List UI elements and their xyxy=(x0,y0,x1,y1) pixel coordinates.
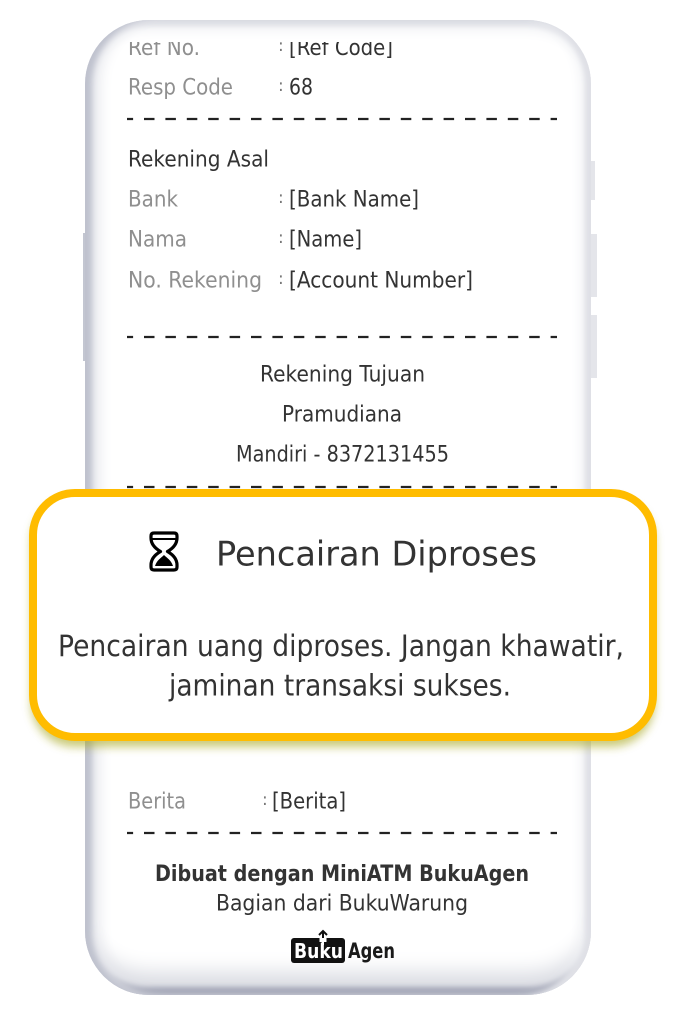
receipt: transaction codes: Ref No. xyxy=(128,36,200,61)
receipt: transaction codes: : xyxy=(278,76,284,96)
BukuAgen logo: Agen xyxy=(348,939,395,963)
callout body text: Pencairan uang diproses. Jangan khawatir, xyxy=(58,629,624,663)
receipt: transaction codes: Resp Code xyxy=(128,76,233,100)
receipt: message row: : xyxy=(262,790,268,810)
receipt: source account: Bank xyxy=(128,188,178,212)
receipt: message row: Berita xyxy=(128,790,186,814)
receipt: destination account: Rekening Tujuan xyxy=(260,362,425,388)
dashed divider 3 xyxy=(127,486,557,488)
callout card xyxy=(31,493,655,747)
icon: hourglass xyxy=(151,533,177,570)
dashed divider 4 xyxy=(127,832,557,834)
callout body text xyxy=(58,629,624,702)
footer text xyxy=(155,862,529,916)
phone side button: right top xyxy=(590,161,595,200)
receipt: source account: No. Rekening xyxy=(128,268,262,294)
receipt: transaction codes: 68 xyxy=(289,76,313,100)
receipt: source account: [Bank Name] xyxy=(289,188,419,212)
phone side button: right bottom xyxy=(590,315,597,378)
receipt: source account: [Name] xyxy=(289,228,362,252)
receipt: transaction codes: [Ref Code] xyxy=(289,36,393,61)
receipt: source account: [Account Number] xyxy=(289,268,473,294)
receipt: source account: : xyxy=(278,188,284,208)
phone frame xyxy=(85,20,591,995)
receipt: destination account: Mandiri - 8372131455 xyxy=(236,442,449,468)
receipt: transaction codes xyxy=(130,42,392,99)
receipt: source account: : xyxy=(278,228,284,248)
receipt: source account xyxy=(128,148,473,294)
callout heading: Pencairan Diproses xyxy=(216,534,537,574)
phone side button: right middle xyxy=(590,234,597,297)
dashed divider 1 xyxy=(127,118,557,120)
receipt: source account: : xyxy=(278,269,284,289)
receipt: source account: Nama xyxy=(128,228,187,252)
receipt: source account: Rekening Asal xyxy=(128,148,269,172)
receipt: message row xyxy=(128,790,346,814)
BukuAgen logo xyxy=(291,931,395,963)
phone side button: left xyxy=(83,233,88,361)
receipt: destination account: Pramudiana xyxy=(282,402,402,428)
receipt: message row: [Berita] xyxy=(272,790,346,814)
BukuAgen logo: Buku xyxy=(294,939,343,963)
receipt: destination account xyxy=(236,362,449,468)
footer text: Bagian dari BukuWarung xyxy=(216,892,468,916)
dashed divider 2 xyxy=(127,336,557,338)
callout body text: jaminan transaksi sukses. xyxy=(168,668,511,702)
footer text: Dibuat dengan MiniATM BukuAgen xyxy=(155,862,529,887)
receipt: transaction codes: : xyxy=(278,36,284,56)
